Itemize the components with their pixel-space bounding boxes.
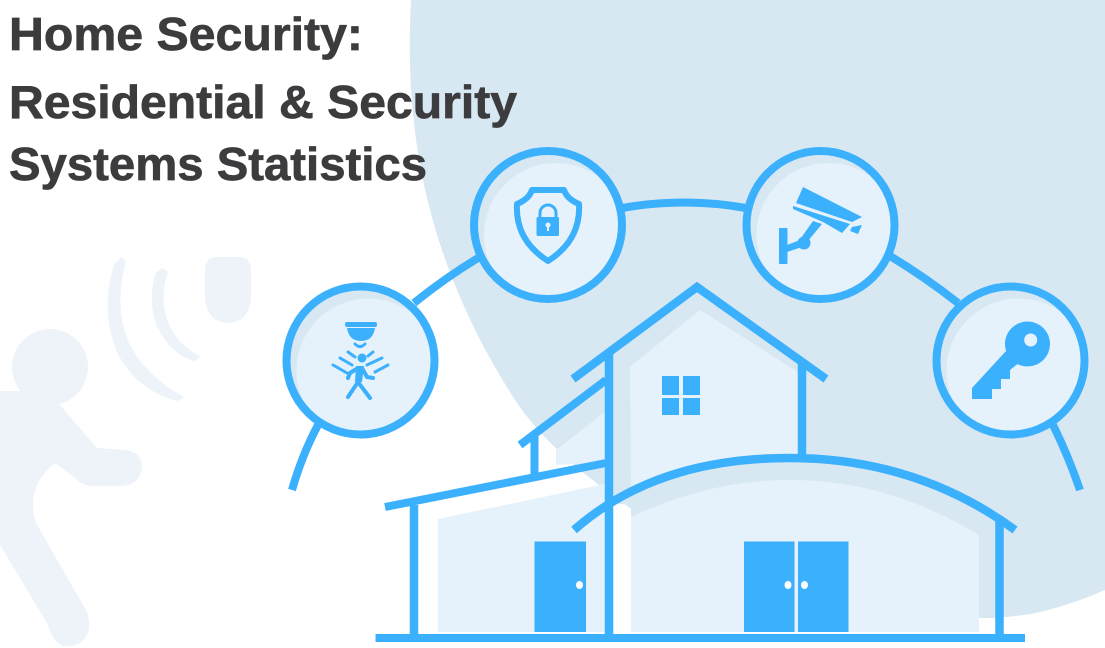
house outline (385, 287, 1015, 638)
watermark sensor waves (108, 257, 201, 401)
side door (534, 542, 586, 632)
icon: motion detector (333, 322, 388, 398)
icon: shield (517, 190, 579, 261)
circle: security camera (746, 151, 900, 307)
circle: key (936, 286, 1090, 442)
watermark figure (0, 329, 142, 647)
connecting arc (292, 202, 1080, 490)
circle: shield lock (474, 151, 628, 307)
house (376, 287, 1025, 642)
window (662, 376, 700, 415)
title: Systems Statistics (9, 138, 427, 190)
watermark sensor body (205, 257, 251, 323)
upper house fill (630, 310, 798, 500)
double door (744, 542, 848, 632)
watermark: motion sensor and walking figure (0, 257, 251, 647)
side wing fill (438, 412, 605, 632)
title: Residential & Security (9, 76, 517, 128)
icon: camera (779, 187, 862, 264)
background circle (410, 0, 1105, 618)
title: Home Security: (9, 8, 363, 60)
title (9, 8, 517, 190)
ground line (376, 634, 1025, 642)
icon: padlock (536, 205, 559, 236)
circle: motion detector (286, 286, 440, 442)
icon: key (972, 322, 1050, 399)
lower hall fill (609, 458, 997, 635)
